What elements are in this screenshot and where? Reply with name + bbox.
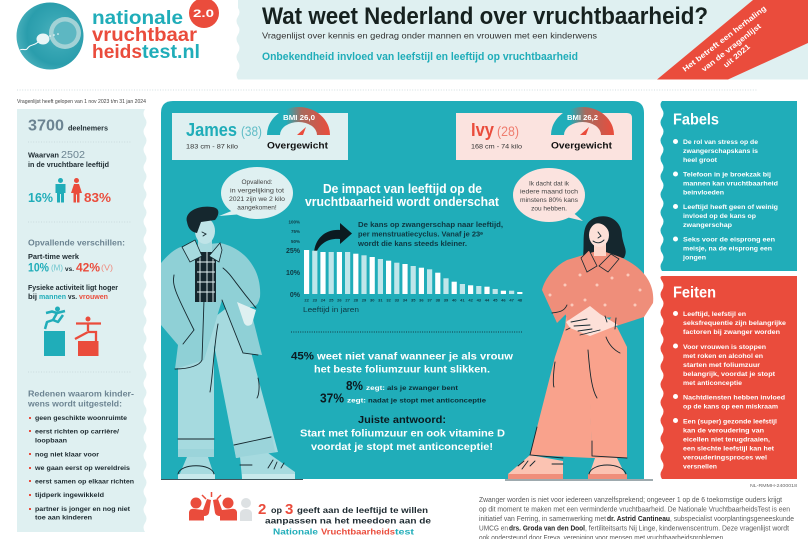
x axis labels: 30 (370, 298, 375, 302)
facts list: eicellen niet terugdraaien, (683, 436, 770, 444)
text block: about the study: Zwanger worden is niet voor iedereen vanzelfsprekend; ongeveer 1 op de 6 toekomstige ouders krijgt (479, 497, 782, 504)
James shirt (195, 252, 216, 302)
x axis labels: 36 (419, 298, 424, 302)
physical activity: vs. (68, 294, 77, 301)
BMI gauge James (267, 107, 330, 150)
x axis labels: 42 (468, 298, 474, 302)
myths list (673, 139, 778, 262)
callout: two out of three: geeft aan de leeftijd te willen (297, 506, 428, 515)
BMI gauge Ivy: Overgewicht (551, 140, 612, 150)
facts list: kan de veroudering van (683, 428, 764, 434)
myths list: meisje, na de eisprong een (683, 246, 772, 252)
ribbon: Het betreft een herhaling (681, 3, 768, 74)
Ivy speech bubble: iedere maand toch (520, 188, 578, 196)
survey period note: Vragenlijst heeft gelopen van 1 nov 2023 t/m 31 jan 2024 (17, 99, 146, 105)
James profile card (172, 107, 348, 160)
facts list: met anticonceptie (683, 380, 742, 387)
physical activity (28, 285, 118, 301)
illustration: Ivy (508, 216, 653, 479)
callout: two out of three: Vruchtbaarheids (321, 528, 396, 536)
James collar (182, 240, 222, 262)
ribbon (657, 0, 808, 80)
x axis labels: 48 (518, 298, 523, 302)
bars (304, 250, 522, 294)
BMI gauge Ivy: BMI 26,2 (567, 115, 598, 122)
myths list: invloed op de kans op (683, 213, 756, 220)
facts list: Leeftijd, leefstijl en (683, 311, 746, 318)
gender split (28, 178, 111, 205)
panel: myths (660, 101, 797, 271)
text block: about the study: op dit moment te maken met een verminderde vruchtbaarheid. De Nationale VruchtbaarheidsTest is een (479, 506, 790, 514)
x axis labels: 37 (427, 298, 433, 302)
reference code: NL-RMMH-2400018 (750, 483, 798, 488)
panel: facts (660, 276, 797, 479)
title: Wat weet Nederland over vruchtbaarheid? (262, 3, 708, 30)
icon: curved arrow (314, 223, 352, 253)
facts list: versnellen (683, 464, 717, 470)
Ivy speech bubble: Ik dacht dat ik (529, 180, 570, 188)
fertile age group (28, 150, 109, 169)
bar chart: chance of pregnancy by age (286, 220, 523, 314)
text block: about the study: drs. Groda van den Dool (509, 526, 585, 532)
Ivy speech bubble: minstens 80% kans (520, 197, 579, 204)
myths heading: Fabels (673, 112, 719, 128)
James hair (187, 207, 218, 233)
facts heading: Feiten (673, 284, 716, 302)
reasons list: partner is jonger en nog niet (35, 506, 131, 513)
correct answer: Start met foliumzuur en ook vitamine D (300, 428, 505, 440)
text block: about the study: initiatief van Ferring, in samenwerking met (479, 516, 606, 523)
James profile card: (38) (241, 123, 262, 139)
facts list: verouderingsproces wel (683, 454, 767, 462)
correct answer: voordat je stopt met anticonceptie! (311, 442, 493, 453)
folic acid answers: 8% (346, 378, 363, 393)
facts list: seksfrequentie zijn belangrijke (683, 320, 786, 327)
chart heading (305, 182, 500, 209)
Ivy hand (566, 306, 618, 336)
Ivy hair (583, 216, 626, 258)
physical activity: bij (28, 294, 37, 301)
y axis labels (286, 220, 301, 299)
folic acid answers: zegt: (347, 398, 366, 404)
x axis labels: 40 (452, 298, 457, 302)
x axis labels: 25 (329, 298, 334, 302)
part-time work (28, 254, 113, 274)
text block: about the study: , subspecialist voorplantingsgeneeskunde (670, 516, 794, 523)
folic acid answers: nadat je stopt met anticonceptie (368, 398, 486, 404)
folic acid answers: 37% (320, 390, 344, 406)
reasons list: tijdperk ingewikkeld (35, 492, 104, 499)
facts list: op de kans op een miskraam (683, 404, 778, 410)
x axis labels: 35 (411, 298, 416, 302)
gender split: 16% (28, 190, 53, 205)
myths list: jongen (682, 254, 706, 262)
chart heading: De impact van leeftijd op de (323, 182, 482, 196)
physical activity: mannen (39, 294, 66, 301)
reasons list: geen geschikte woonruimte (35, 415, 127, 422)
y axis labels: 100% (288, 220, 300, 224)
James outlines (173, 232, 284, 474)
James speech bubble: aangekomen! (237, 204, 277, 212)
reasons list: nog niet klaar voor (35, 452, 100, 458)
folic acid answers: als je zwanger bent (387, 385, 459, 392)
x axis labels (304, 298, 523, 302)
reasons list: we gaan eerst op wereldreis (34, 465, 130, 472)
x axis labels: 41 (460, 298, 465, 302)
James profile card: 183 cm - 87 kilo (186, 144, 238, 150)
x axis labels: 32 (386, 298, 392, 302)
facts list (673, 311, 786, 470)
myths list: zwangerschapskans is (683, 148, 758, 155)
reasons list: eerst richten op carrière/ (35, 428, 119, 436)
James speech bubble: Opvallend: (241, 179, 273, 186)
logo wordmark: nationale (92, 8, 183, 29)
logo wordmark: vruchtbaar (92, 25, 198, 46)
logo badge 2.0: 2.0 (193, 8, 214, 20)
y axis labels: 0% (290, 292, 301, 299)
x axis labels: 43 (477, 298, 482, 302)
Ivy face (588, 218, 611, 256)
folic acid answers (320, 378, 486, 406)
logo wordmark (92, 8, 200, 63)
callout: two out of three: Nationale (273, 528, 319, 536)
part-time work: (V) (101, 264, 113, 272)
callout: two out of three (258, 501, 432, 536)
reasons heading: wens wordt uitgesteld: (27, 398, 122, 408)
James profile card: James (186, 120, 237, 140)
x axis labels: 22 (304, 298, 310, 302)
facts list: starten met foliumzuur (683, 362, 761, 369)
James speech bubble (219, 167, 293, 219)
x axis labels: 26 (337, 298, 342, 302)
icon: man (56, 178, 66, 202)
text block: about the study: UMCG en (479, 526, 508, 532)
part-time work: 42% (76, 260, 100, 274)
ribbon: uit 2021 (722, 42, 752, 70)
James neck and face (195, 218, 215, 252)
icon: woman (71, 178, 82, 202)
x axis labels: 28 (354, 298, 359, 302)
logo wordmark: heids (92, 42, 142, 63)
logo wordmark: test.nl (142, 42, 200, 63)
text block: about the study (479, 497, 794, 539)
facts list: Een (super) gezonde leefstijl (683, 418, 777, 426)
facts list: factoren bij zwanger worden (683, 329, 780, 336)
text block: about the study: dr. Astrid Cantineau (607, 516, 670, 523)
James speech bubble: in vergelijking tot (230, 188, 284, 194)
part-time work: Part-time werk (28, 254, 79, 261)
Ivy shoes (508, 455, 627, 478)
BMI gauge James: BMI 26,0 (283, 115, 315, 122)
folic acid statistic: het beste foliumzuur kunt slikken. (314, 364, 490, 376)
Ivy profile card (456, 107, 632, 160)
reasons list: toe aan kinderen (35, 514, 92, 522)
myths list: De rol van stress op de (683, 139, 758, 146)
y axis labels: 75% (291, 229, 300, 234)
x axis title: Leeftijd in jaren (303, 307, 359, 314)
facts list: een slechte leefstijl kan het (683, 446, 775, 452)
myths list: Leeftijd heeft geen of weinig (683, 204, 778, 211)
reasons list: eerst samen op elkaar richten (35, 478, 134, 486)
participant count: 3700 (28, 118, 64, 134)
physical activity: Fysieke activiteit ligt hoger (28, 285, 118, 292)
fertile age group: in de vruchtbare leeftijd (28, 162, 109, 169)
chart note (357, 220, 503, 248)
x axis labels: 46 (501, 298, 506, 302)
facts list: met roken en alcohol en (683, 353, 763, 360)
chart note: wordt die kans steeds kleiner. (357, 239, 467, 248)
folic acid statistic: 45% (291, 350, 314, 362)
x axis labels: 45 (493, 298, 498, 302)
physical activity: vrouwen (79, 294, 108, 301)
ribbon: van de vragenlijst (700, 21, 763, 74)
logo badge 2.0 (189, 0, 219, 28)
callout: two out of three: 3 (285, 501, 293, 518)
reasons heading: Redenen waarom kinder- (28, 388, 134, 398)
callout: two out of three: 2 (258, 501, 266, 518)
fertile age group: Waarvan (28, 152, 59, 160)
x axis labels: 24 (321, 298, 326, 302)
correct answer: Juiste antwoord: (358, 415, 446, 426)
BMI gauge James: Overgewicht (267, 140, 328, 150)
folic acid statistic (291, 350, 513, 376)
reasons list (29, 415, 134, 522)
y axis labels: 10% (286, 270, 301, 277)
Ivy profile card: 168 cm - 74 kilo (471, 144, 522, 150)
x axis labels: 34 (403, 298, 408, 302)
folic acid statistic: weet niet vanaf wanneer je als vrouw (316, 352, 513, 362)
correct answer (300, 415, 505, 453)
James coat (161, 243, 262, 369)
teal subheading: Onbekendheid invloed van leefstijl en leeftijd op vruchtbaarheid (262, 51, 578, 63)
x axis labels: 31 (378, 298, 383, 302)
Ivy profile card: (28) (497, 123, 519, 139)
reasons list: loopbaan (35, 438, 67, 444)
chart note: per menstruatiecyclus. Vanaf je 23ᵉ (358, 230, 483, 238)
fertile age group: 2502 (61, 150, 85, 161)
Ivy speech bubble (513, 168, 585, 222)
Ivy outlines (518, 232, 627, 474)
Ivy trousers (530, 317, 627, 458)
callout: two out of three: op (271, 506, 282, 515)
logo sperm (20, 33, 59, 50)
participant count: deelnemers (68, 126, 108, 132)
Ivy collar (581, 250, 619, 272)
Ivy blouse (542, 250, 653, 327)
y axis labels: 50% (291, 239, 300, 244)
gender split: 83% (84, 190, 111, 205)
chart heading: vruchtbaarheid wordt onderschat (305, 195, 500, 209)
part-time work: vs. (65, 267, 74, 273)
x axis labels: 39 (444, 298, 449, 302)
subtitle: Vragenlijst over kennis en gedrag onder mannen en vrouwen met een kinderwens (262, 30, 597, 40)
James trousers (178, 300, 278, 458)
ground lines (161, 478, 653, 481)
James shoes (178, 453, 295, 478)
icon: high five (189, 492, 252, 521)
icon: person on low block (75, 316, 101, 356)
Ivy blouse dots (548, 274, 642, 306)
x axis labels: 38 (436, 298, 441, 302)
illustration: James (161, 207, 295, 479)
logo watercolor circle (16, 2, 84, 70)
participant count (28, 118, 108, 134)
myths list: Telefoon in je broekzak bij (683, 172, 771, 178)
x axis labels: 44 (485, 298, 490, 302)
notable differences heading: Opvallende verschillen: (28, 238, 125, 248)
header panel (236, 0, 808, 80)
callout: two out of three: aanpassen na het meedoen aan de (265, 516, 432, 526)
part-time work: 10% (28, 260, 49, 274)
x axis labels: 29 (362, 298, 367, 302)
x axis labels: 47 (509, 298, 515, 302)
x axis labels: 23 (313, 298, 318, 302)
BMI gauge Ivy (551, 107, 614, 150)
logo (16, 0, 219, 70)
James speech bubble: 2021 zijn we 2 kilo (229, 196, 285, 203)
myths list: mannen kan vruchtbaarheid (683, 180, 778, 188)
callout: two out of three: test (395, 528, 414, 536)
y axis labels: 25% (286, 248, 301, 255)
text block: about the study: , fertiliteitsarts Nij Linge, kinderwenscentrum. Deze vragenlijst wordt (585, 526, 789, 532)
folic acid answers: zegt: (366, 385, 385, 392)
chart note: De kans op zwangerschap naar leeftijd, (358, 220, 503, 229)
reasons heading (27, 388, 134, 408)
myths list: Seks voor de eisprong een (683, 236, 775, 244)
panel: participants (17, 109, 146, 532)
x axis labels: 33 (395, 298, 400, 302)
Ivy speech bubble: zou hebben. (531, 206, 567, 212)
myths list: zwangerschap (683, 222, 732, 229)
Ivy profile card: Ivy (471, 120, 494, 140)
facts list: belangrijk, voordat je stopt (683, 371, 776, 378)
icon: runner on tall block (44, 306, 65, 356)
myths list: beinvloeden (683, 190, 724, 196)
panel: central impact (161, 101, 653, 480)
facts list: Nachtdiensten hebben invloed (683, 394, 785, 402)
James hand (237, 302, 256, 326)
part-time work: (M) (51, 264, 63, 272)
myths list: heel groot (683, 157, 718, 164)
x axis labels: 27 (345, 298, 351, 302)
facts list: Voor vrouwen is stoppen (683, 344, 766, 351)
